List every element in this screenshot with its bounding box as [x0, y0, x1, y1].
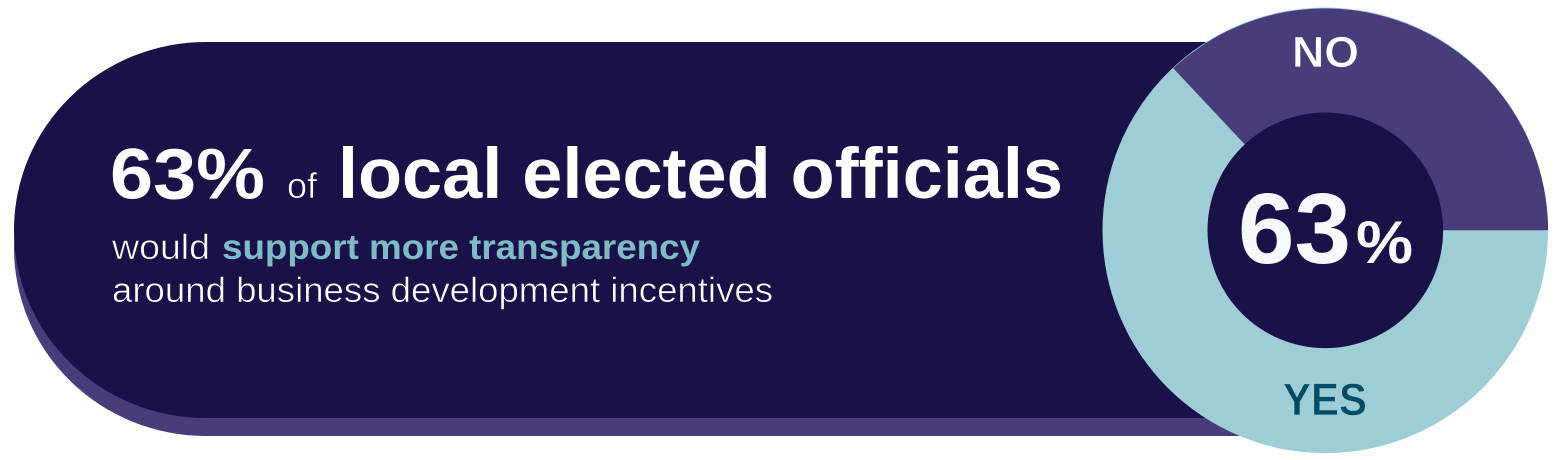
text block: subheading [111, 228, 773, 310]
label: yes: YES [1283, 374, 1367, 425]
text block: subheading: support more transparency [222, 228, 701, 267]
heading: local elected officials [338, 135, 1063, 214]
centre value [1238, 173, 1413, 285]
heading: of [287, 165, 318, 206]
label: no: NO [1292, 28, 1359, 77]
segment: yes [1102, 8, 1548, 453]
centre value: % [1356, 209, 1413, 276]
panel: pill banner [14, 42, 1320, 436]
text block: subheading: would [111, 228, 210, 267]
segment: no [1173, 8, 1548, 230]
text block: subheading: around business development incentives [112, 271, 773, 310]
donut centre [1208, 112, 1443, 348]
donut chart [1102, 8, 1548, 453]
pill body [14, 42, 1320, 418]
heading: 63% [110, 136, 265, 214]
pill shadow [14, 60, 1320, 436]
centre value: 63 [1238, 173, 1351, 285]
